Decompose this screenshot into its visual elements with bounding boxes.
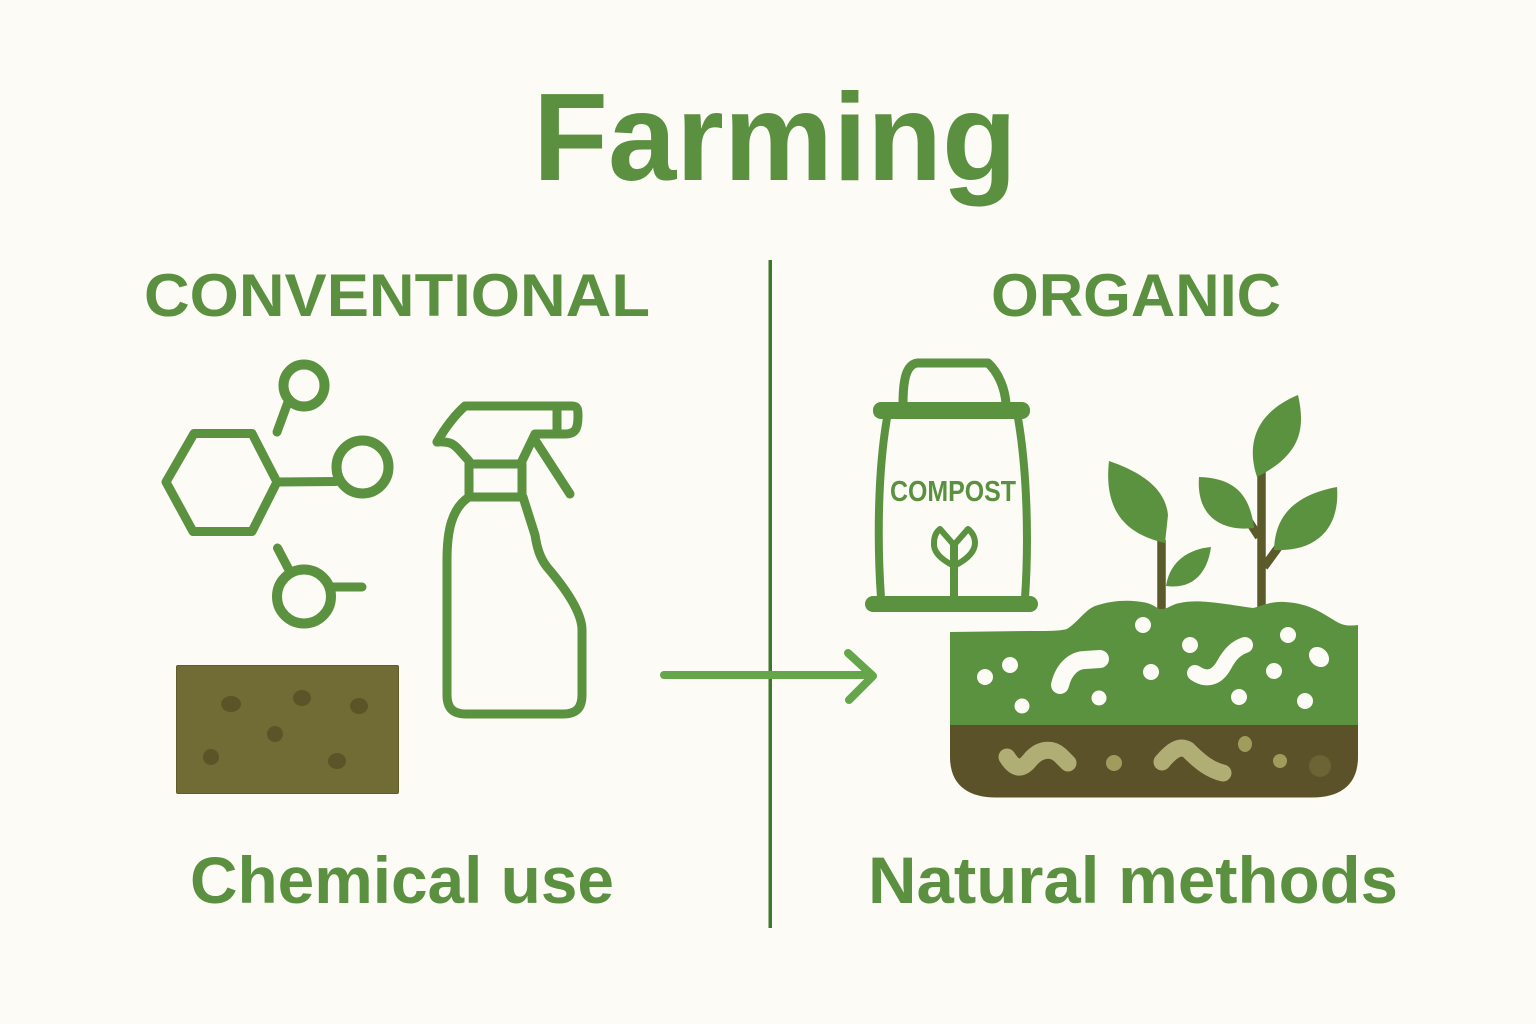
caption: natural methods: Natural methods [868, 843, 1398, 917]
center divider [768, 260, 772, 928]
icon: spray bottle [437, 406, 582, 714]
arrow [664, 653, 873, 700]
title: Farming [533, 69, 1017, 207]
icon: chemical molecule [166, 364, 388, 624]
heading: organic: ORGANIC [991, 262, 1281, 329]
plants [1108, 395, 1337, 610]
compost label: COMPOST [890, 476, 1016, 508]
heading: conventional: CONVENTIONAL [144, 262, 650, 329]
organic soil cross-section [950, 601, 1358, 798]
conventional soil block [176, 666, 398, 794]
caption: chemical use: Chemical use [190, 843, 614, 917]
icon: compost bag [865, 363, 1038, 612]
